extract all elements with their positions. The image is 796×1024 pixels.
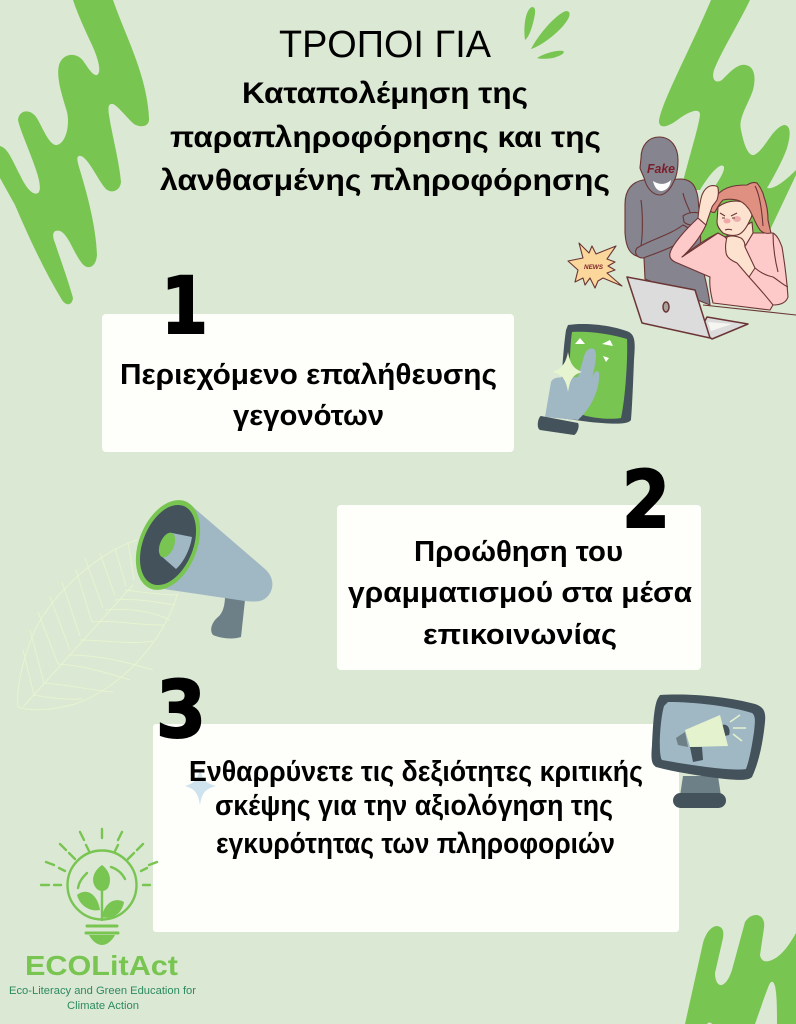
icon: pale leaf outline <box>18 540 178 710</box>
icon: tablet with touching hand <box>538 324 635 435</box>
news burst <box>568 243 622 288</box>
green blob: top left <box>0 0 149 304</box>
panel: step 1 card: γεγονότων <box>233 400 384 432</box>
step 3 text: Ενθαρρύνετε τις δεξιότητες κριτικής <box>189 756 643 788</box>
decorative green leaves near title <box>524 7 570 59</box>
panel: step 2 card: Προώθηση του <box>414 536 623 568</box>
news burst: NEWS <box>584 264 604 271</box>
panel: step 2 card: επικοινωνίας <box>423 619 617 651</box>
step 3 text <box>189 756 643 860</box>
logo wordmark: ECOLitAct <box>25 950 178 981</box>
laptop <box>627 277 748 339</box>
number 3: 3 <box>156 666 206 756</box>
panel: step 3 card background <box>153 724 679 932</box>
man in grey: Fake <box>647 161 675 176</box>
green blob: bottom right <box>685 915 796 1024</box>
panel: step 1 card: Περιεχόμενο επαλήθευσης <box>120 359 497 391</box>
sweater <box>670 218 788 310</box>
neck <box>725 222 753 253</box>
title: Καταπολέμηση της <box>242 77 528 110</box>
face <box>717 201 752 235</box>
panel: step 2 card <box>337 505 701 670</box>
number 2: 2 <box>622 456 670 546</box>
green blob: top right <box>659 0 796 273</box>
logo tagline <box>9 985 196 1012</box>
panel: step 2 card: γραμματισμού στα μέσα <box>348 577 692 609</box>
logo tagline: Eco-Literacy and Green Education for <box>9 985 196 997</box>
logo tagline: Climate Action <box>67 1000 139 1012</box>
panel: step 1 card <box>102 314 514 452</box>
step 3 text: εγκυρότητας των πληροφοριών <box>216 828 615 860</box>
icon: monitor with megaphone <box>651 694 765 808</box>
chin hand and forearm <box>726 236 755 277</box>
sleeve lines <box>682 233 788 305</box>
icon: megaphone <box>124 491 272 638</box>
logo: ECOLitAct <box>9 829 196 1012</box>
title: ΤΡΟΠΟΙ ΓΙΑ <box>279 24 492 66</box>
man in grey <box>625 137 710 305</box>
title <box>160 24 610 197</box>
raised hand <box>698 186 718 225</box>
title: λανθασμένης πληροφόρησης <box>160 164 610 197</box>
step 3 text: σκέψης για την αξιολόγηση της <box>215 790 613 822</box>
illustration: faker man and worried woman at laptop <box>568 137 796 339</box>
icon: light bulb with plant <box>41 829 157 945</box>
hair and ponytail <box>710 183 771 233</box>
icon: pale blue sparkle <box>185 768 216 805</box>
title: παραπληροφόρησης και της <box>170 121 601 154</box>
table line <box>703 305 796 315</box>
number 1: 1 <box>161 262 208 352</box>
woman in pink <box>670 183 788 310</box>
